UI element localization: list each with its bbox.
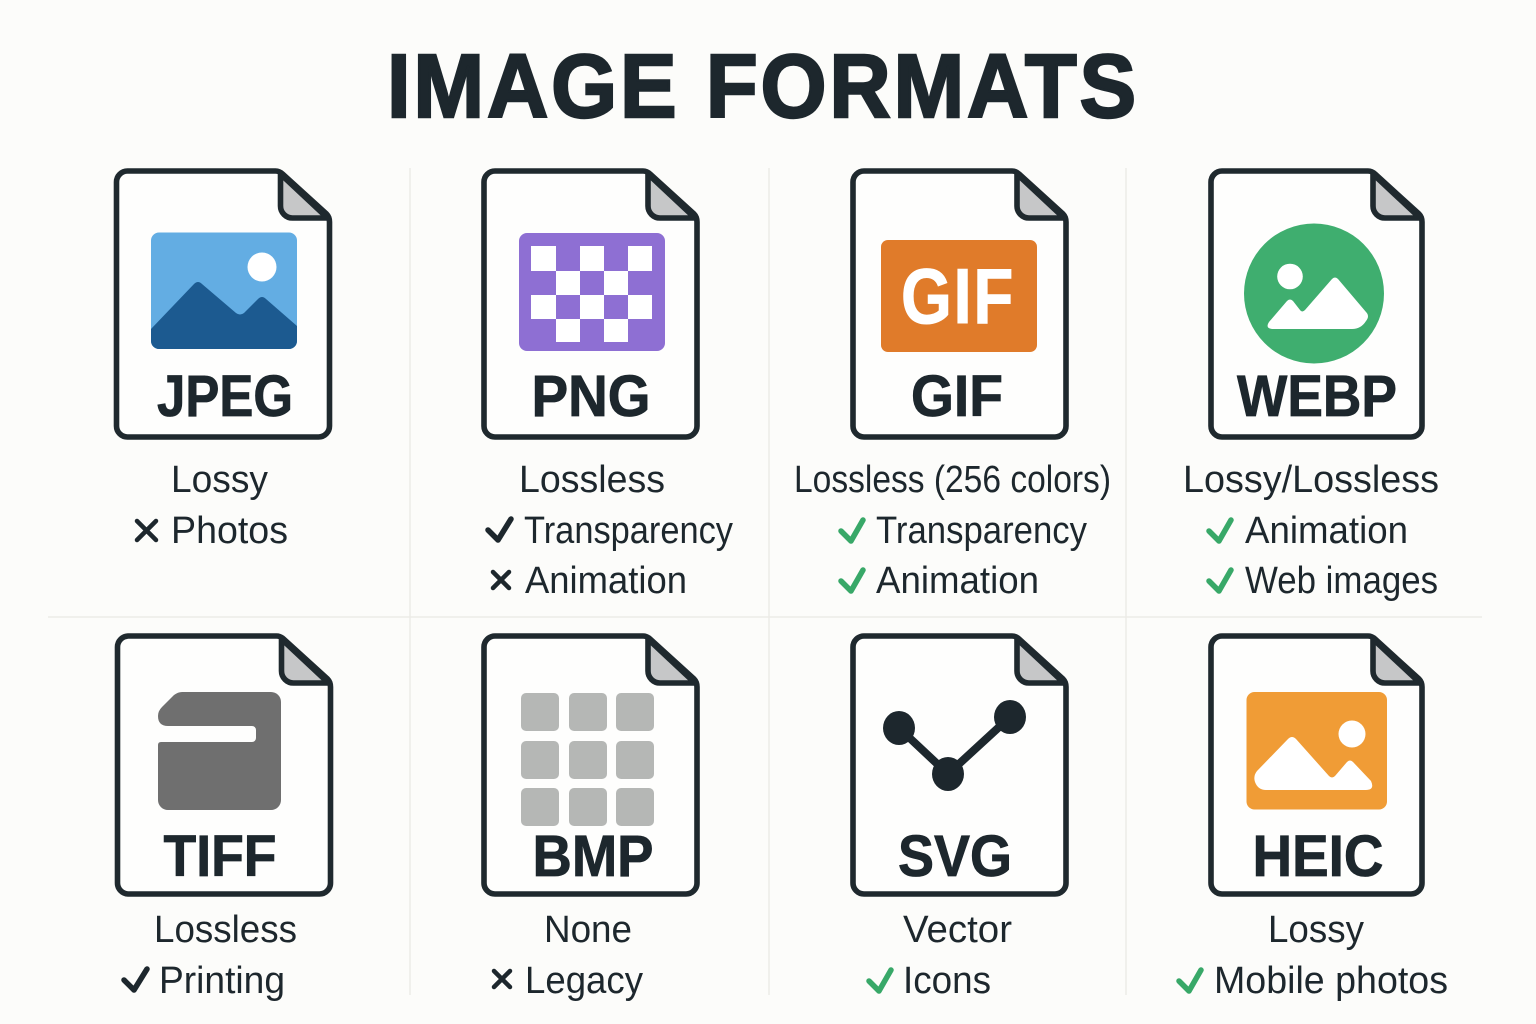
compression type: Lossy/Lossless	[1183, 459, 1439, 501]
compression type: Lossless	[519, 459, 665, 501]
format name: JPEG	[157, 364, 293, 429]
format name: WEBP	[1237, 364, 1397, 429]
format name: GIF	[911, 364, 1003, 429]
file icon: JPEG	[116, 171, 330, 437]
feature: photos: Photos	[171, 510, 288, 552]
compression type: Lossless	[154, 909, 297, 951]
compression type: Vector	[903, 909, 1012, 951]
format name: PNG	[532, 364, 650, 429]
panel: PNG	[484, 171, 733, 602]
file icon: GIF: GIF	[901, 252, 1015, 340]
feature: icons: Icons	[903, 960, 991, 1002]
format name: TIFF	[164, 824, 276, 889]
panel: TIFF	[118, 636, 330, 1002]
compression type: None	[544, 909, 632, 951]
panel: HEIC	[1179, 636, 1448, 1002]
format name: BMP	[532, 824, 654, 889]
file icon: PNG	[484, 171, 697, 437]
compression type: Lossy	[171, 459, 268, 501]
feature: legacy: Legacy	[525, 960, 643, 1002]
file icon: BMP	[484, 636, 697, 894]
file icon: HEIC	[1211, 636, 1422, 894]
panel: GIF	[794, 171, 1111, 602]
panel: JPEG	[116, 171, 330, 552]
compression type: Lossless (256 colors)	[794, 459, 1111, 501]
panel: WEBP	[1183, 171, 1439, 602]
panel: SVG	[853, 636, 1066, 1002]
file icon: SVG	[853, 636, 1066, 894]
format name: HEIC	[1252, 824, 1384, 889]
file icon: TIFF	[118, 636, 330, 894]
panel: BMP	[484, 636, 697, 1002]
file icon: GIF	[853, 171, 1066, 437]
feature: transparency: Transparency	[524, 510, 733, 552]
title: IMAGE FORMATS	[387, 37, 1139, 137]
feature: animation: Animation	[876, 560, 1039, 602]
feature: transparency: Transparency	[876, 510, 1087, 552]
feature: animation: Animation	[1245, 510, 1408, 552]
feature: mobile photos: Mobile photos	[1214, 960, 1448, 1002]
feature: web images: Web images	[1245, 560, 1438, 602]
file icon: WEBP	[1211, 171, 1422, 437]
feature: printing: Printing	[159, 960, 285, 1002]
feature: animation: Animation	[525, 560, 687, 602]
format name: SVG	[898, 824, 1012, 889]
compression type: Lossy	[1268, 909, 1364, 951]
